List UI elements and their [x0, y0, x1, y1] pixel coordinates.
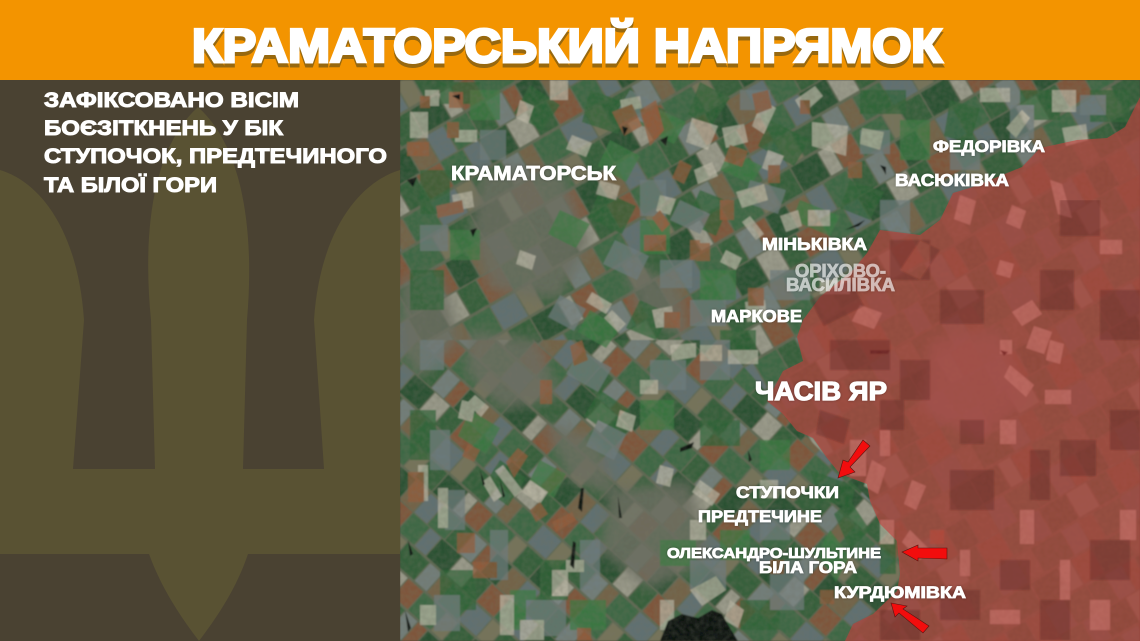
- label: Ступочки: СТУПОЧКИ: [736, 484, 839, 502]
- label: Федорівка: ФЕДОРІВКА: [933, 137, 1045, 156]
- title banner: [0, 0, 1140, 80]
- label: Оріхово-Василівка: ВАСИЛІВКА: [786, 274, 895, 295]
- map: darker fields in occupied area: [810, 200, 1140, 640]
- text block: summary: ЗАФІКСОВАНО ВІСІМ: [44, 89, 299, 112]
- text block: summary: ТА БІЛОЇ ГОРИ: [44, 174, 217, 197]
- label: Оріхово-Василівка: [786, 260, 895, 295]
- text block: summary: СТУПОЧОК, ПРЕДТЕЧИНОГО: [44, 145, 387, 168]
- map labels: [451, 137, 1045, 602]
- arrow: toward Ступочки: [838, 440, 870, 478]
- label: Оріхово-Василівка: ОРІХОВО-: [795, 260, 886, 281]
- label: Часів Яр: ЧАСІВ ЯР: [755, 376, 887, 406]
- arrow: toward Олександро-Шультине: [902, 545, 947, 561]
- map: satellite view: [400, 80, 1140, 641]
- text block: summary: [44, 89, 387, 197]
- arrow: toward Курдюмівка: [891, 603, 929, 633]
- label: Курдюмівка: КУРДЮМІВКА: [834, 584, 966, 602]
- label: Біла Гора: БІЛА ГОРА: [759, 559, 857, 577]
- label: Краматорськ: КРАМАТОРСЬК: [451, 163, 617, 185]
- label: Васюківка: ВАСЮКІВКА: [895, 170, 1009, 190]
- title: КРАМАТОРСЬКИЙ НАПРЯМОК: [192, 18, 943, 73]
- icon: trident emblem: [0, 107, 400, 641]
- label: Міньківка: МІНЬКІВКА: [762, 234, 867, 254]
- label: Маркове: МАРКОВЕ: [711, 306, 802, 326]
- map: red occupied area: [767, 97, 1140, 641]
- label: Предтечине: ПРЕДТЕЧИНЕ: [698, 508, 822, 526]
- label: Олександро-Шультине: ОЛЕКСАНДРО-ШУЛЬТИНЕ: [667, 546, 881, 562]
- text block: summary: БОЄЗІТКНЕНЬ У БІК: [44, 117, 283, 140]
- title shadow: КРАМАТОРСЬКИЙ НАПРЯМОК: [192, 22, 943, 77]
- panel: left background with trident: [0, 80, 400, 641]
